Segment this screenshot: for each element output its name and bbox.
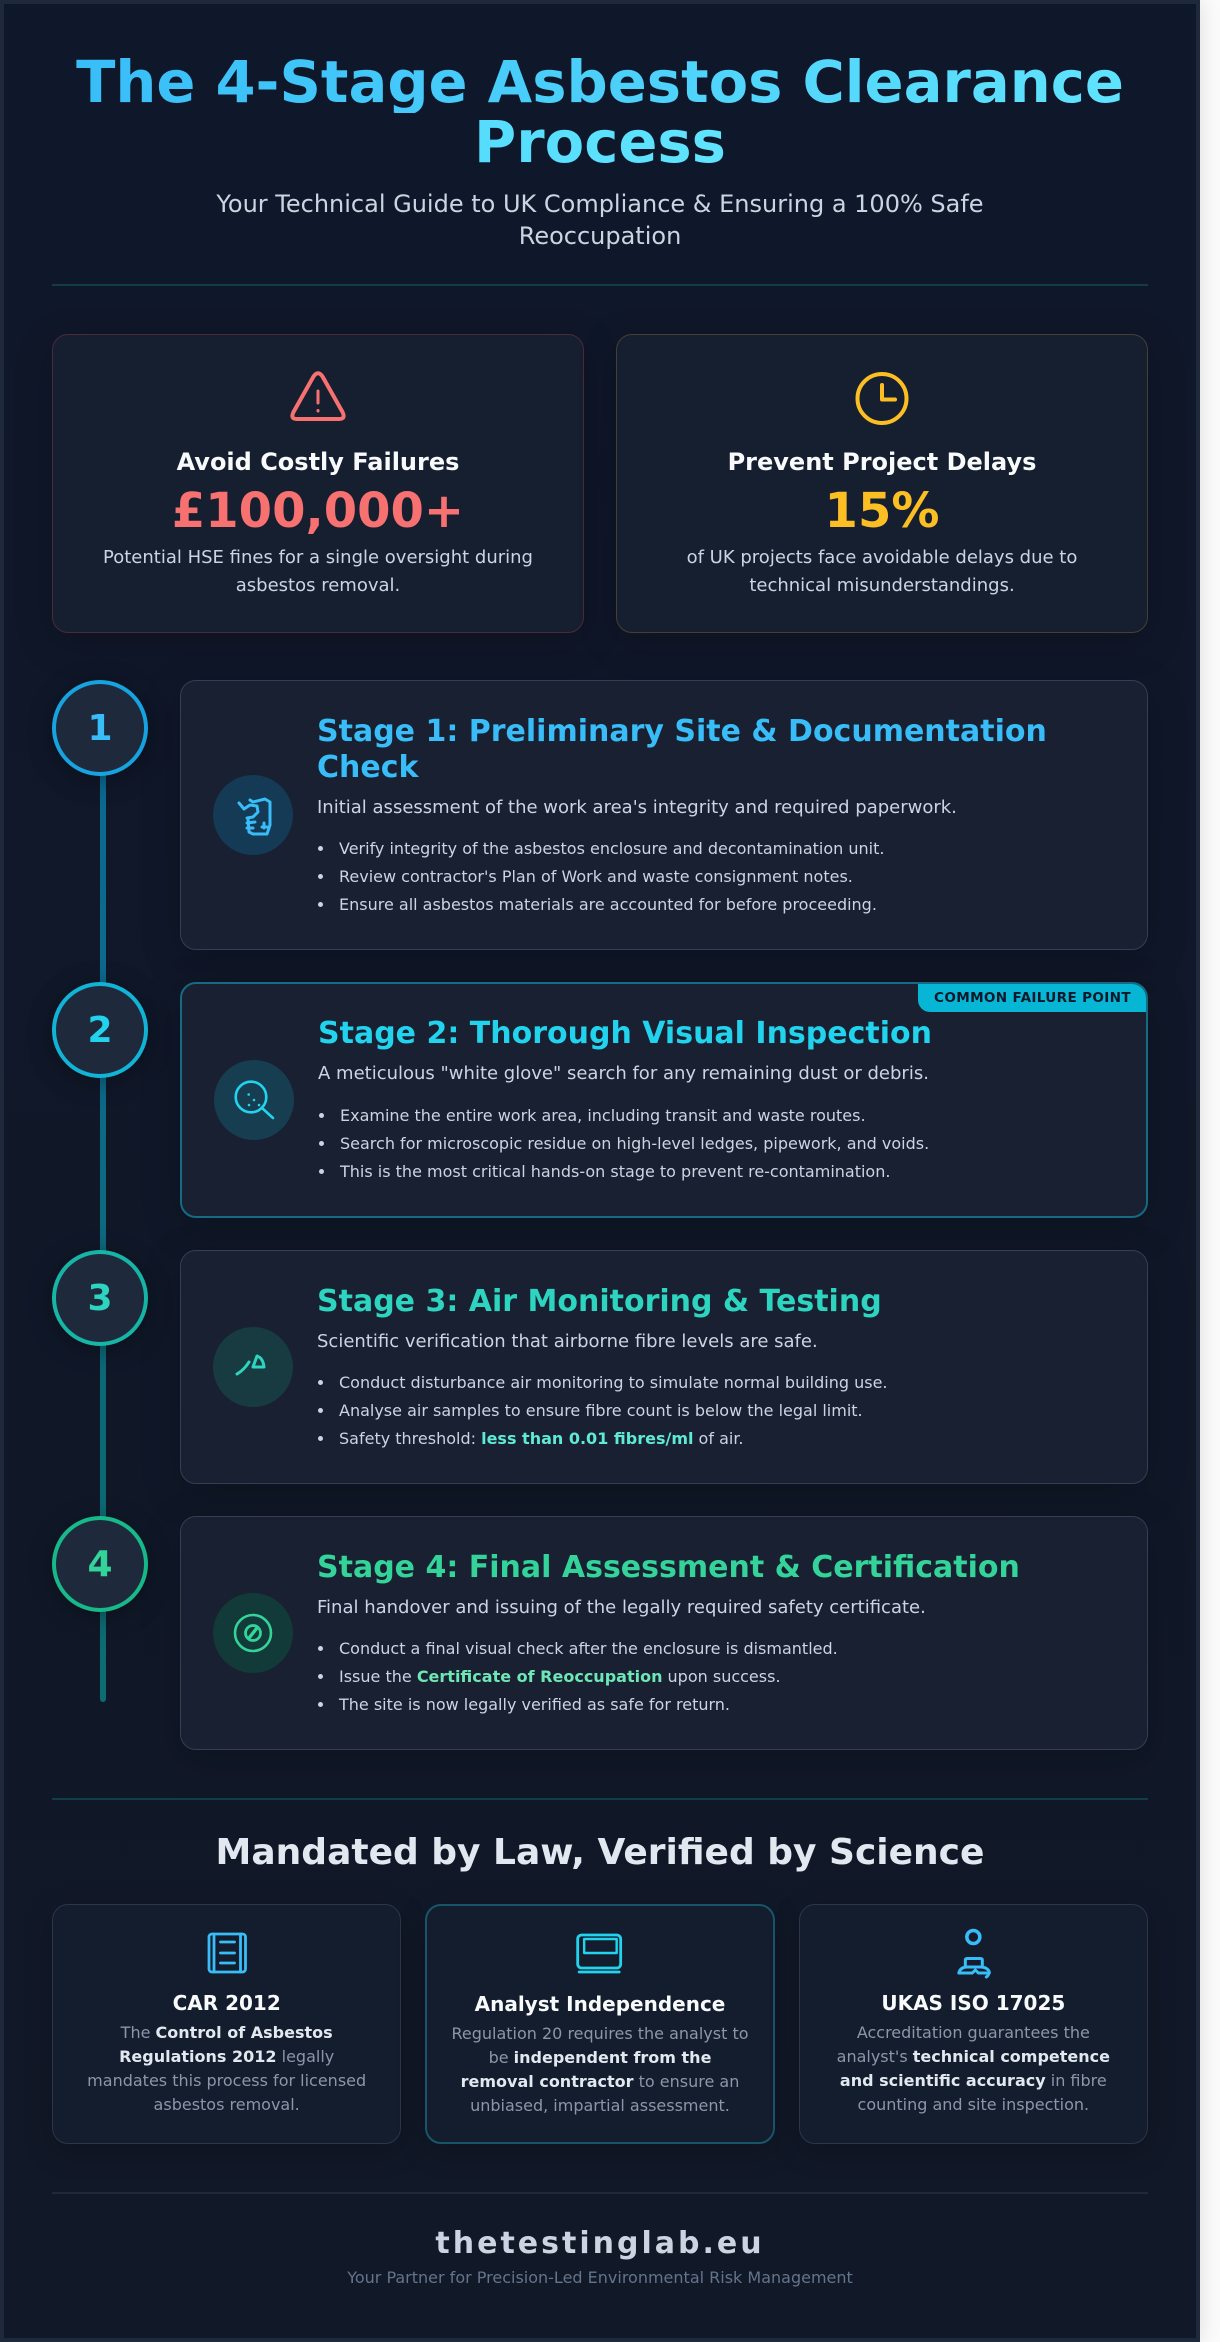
- stat heading: Prevent Project Delays: [728, 448, 1036, 476]
- panel: prevent project delays: [616, 334, 1148, 633]
- card body: [837, 2023, 1110, 2114]
- card body: [451, 2024, 749, 2115]
- stage summary: Final handover and issuing of the legally required safety certificate.: [317, 1597, 926, 1618]
- stage number 4: [52, 1516, 148, 1612]
- panel: stage 3: [180, 1250, 1148, 1484]
- stat description: of UK projects face avoidable delays due to: [687, 546, 1077, 568]
- card body: Accreditation guarantees the: [857, 2023, 1090, 2042]
- panel: stage 2: [180, 982, 1148, 1218]
- stat description: [687, 546, 1077, 596]
- stage heading: Check: [317, 750, 418, 785]
- stage heading: Stage 1: Preliminary Site & Documentation: [317, 714, 1047, 749]
- card heading: Analyst Independence: [475, 1992, 725, 2016]
- icon: air sampler: [213, 1327, 293, 1407]
- card body: Regulation 20 requires the analyst to: [451, 2024, 749, 2043]
- subtitle: [216, 190, 984, 250]
- card body: be independent from the: [489, 2048, 711, 2067]
- section heading: Mandated by Law, Verified by Science: [216, 1832, 984, 1873]
- stage checklist: The site is now legally verified as safe for return.: [339, 1694, 730, 1714]
- stage checklist: [318, 1638, 838, 1714]
- stage checklist: Issue the Certificate of Reoccupation upon success.: [339, 1666, 781, 1686]
- panel: UKAS ISO 17025: [799, 1904, 1148, 2144]
- stage number 1: [52, 680, 148, 776]
- card body: unbiased, impartial assessment.: [470, 2096, 730, 2115]
- stage number 1: 1: [87, 708, 113, 748]
- icon: clock: [856, 372, 908, 425]
- stage summary: Initial assessment of the work area's integrity and required paperwork.: [317, 797, 957, 818]
- icon: analyst laptop: [576, 1934, 622, 1974]
- panel: avoid costly failures: [52, 334, 584, 633]
- card body: analyst's technical competence: [837, 2047, 1110, 2066]
- panel: analyst independence: [425, 1904, 775, 2144]
- icon: regulations book: [208, 1932, 247, 1974]
- card body: and scientific accuracy in fibre: [840, 2071, 1107, 2090]
- timeline line: [100, 700, 106, 1702]
- stage summary: Scientific verification that airborne fibre levels are safe.: [317, 1331, 818, 1352]
- footer tagline: Your Partner for Precision-Led Environmental Risk Management: [347, 2268, 853, 2286]
- card body: counting and site inspection.: [858, 2095, 1089, 2114]
- panel: CAR 2012: [52, 1904, 401, 2144]
- stage heading: Stage 2: Thorough Visual Inspection: [318, 1016, 932, 1051]
- stat value: £100,000+: [172, 483, 464, 539]
- stage checklist: [318, 838, 884, 914]
- stage heading: Stage 4: Final Assessment & Certification: [317, 1550, 1020, 1585]
- icon: clipboard: [213, 775, 293, 855]
- badge: common failure point: [918, 983, 1147, 1012]
- stage checklist: Conduct a final visual check after the enclosure is dismantled.: [339, 1638, 838, 1658]
- title: Process: [474, 109, 726, 176]
- footer brand: thetestinglab.eu: [435, 2226, 765, 2261]
- stage number 2: 2: [87, 1010, 113, 1050]
- stage summary: A meticulous "white glove" search for any remaining dust or debris.: [318, 1063, 929, 1084]
- card body: removal contractor to ensure an: [461, 2072, 739, 2091]
- card heading: UKAS ISO 17025: [881, 1991, 1065, 2015]
- stage heading: Stage 3: Air Monitoring & Testing: [317, 1284, 882, 1319]
- icon: warning triangle: [290, 371, 346, 421]
- stage number 3: 3: [87, 1278, 113, 1318]
- card body: asbestos removal.: [154, 2095, 300, 2114]
- card body: The Control of Asbestos: [121, 2023, 333, 2042]
- icon: accredited person: [957, 1928, 991, 1979]
- stage checklist: Analyse air samples to ensure fibre count is below the legal limit.: [339, 1400, 863, 1420]
- stage checklist: Conduct disturbance air monitoring to simulate normal building use.: [339, 1372, 888, 1392]
- stage number 3: [52, 1250, 148, 1346]
- subtitle: Your Technical Guide to UK Compliance & Ensuring a 100% Safe: [216, 190, 984, 218]
- panel: stage 1: [180, 680, 1148, 950]
- stat description: asbestos removal.: [236, 575, 400, 596]
- card body: [87, 2023, 366, 2114]
- card body: Regulations 2012 legally: [119, 2047, 334, 2066]
- icon: magnifier: [214, 1060, 294, 1140]
- stage checklist: This is the most critical hands-on stage to prevent re-contamination.: [340, 1162, 890, 1180]
- stage checklist: Search for microscopic residue on high-level ledges, pipework, and voids.: [340, 1134, 929, 1152]
- card body: mandates this process for licensed: [87, 2071, 366, 2090]
- icon: certified check: [213, 1593, 293, 1673]
- title: The 4-Stage Asbestos Clearance: [76, 49, 1124, 116]
- title: [76, 49, 1124, 176]
- stat description: Potential HSE fines for a single oversight during: [103, 546, 533, 568]
- stage heading: [317, 714, 1047, 785]
- stage checklist: [319, 1106, 929, 1180]
- stat heading: Avoid Costly Failures: [177, 448, 459, 476]
- panel: stage 4: [180, 1516, 1148, 1750]
- stage number 4: 4: [87, 1544, 113, 1584]
- stat description: technical misunderstandings.: [749, 575, 1015, 596]
- subtitle: Reoccupation: [519, 222, 681, 250]
- stat description: [103, 546, 533, 596]
- stat value: 15%: [825, 483, 939, 539]
- stage checklist: [318, 1372, 888, 1448]
- stage checklist: Safety threshold: less than 0.01 fibres/ml of air.: [339, 1428, 744, 1448]
- badge: common failure point: COMMON FAILURE POINT: [934, 990, 1131, 1006]
- stage number 2: [52, 982, 148, 1078]
- stage checklist: Ensure all asbestos materials are accounted for before proceeding.: [339, 894, 877, 914]
- stage checklist: Review contractor's Plan of Work and waste consignment notes.: [339, 866, 853, 886]
- stage checklist: Verify integrity of the asbestos enclosure and decontamination unit.: [339, 838, 884, 858]
- card heading: CAR 2012: [173, 1991, 281, 2015]
- stage checklist: Examine the entire work area, including transit and waste routes.: [340, 1106, 866, 1124]
